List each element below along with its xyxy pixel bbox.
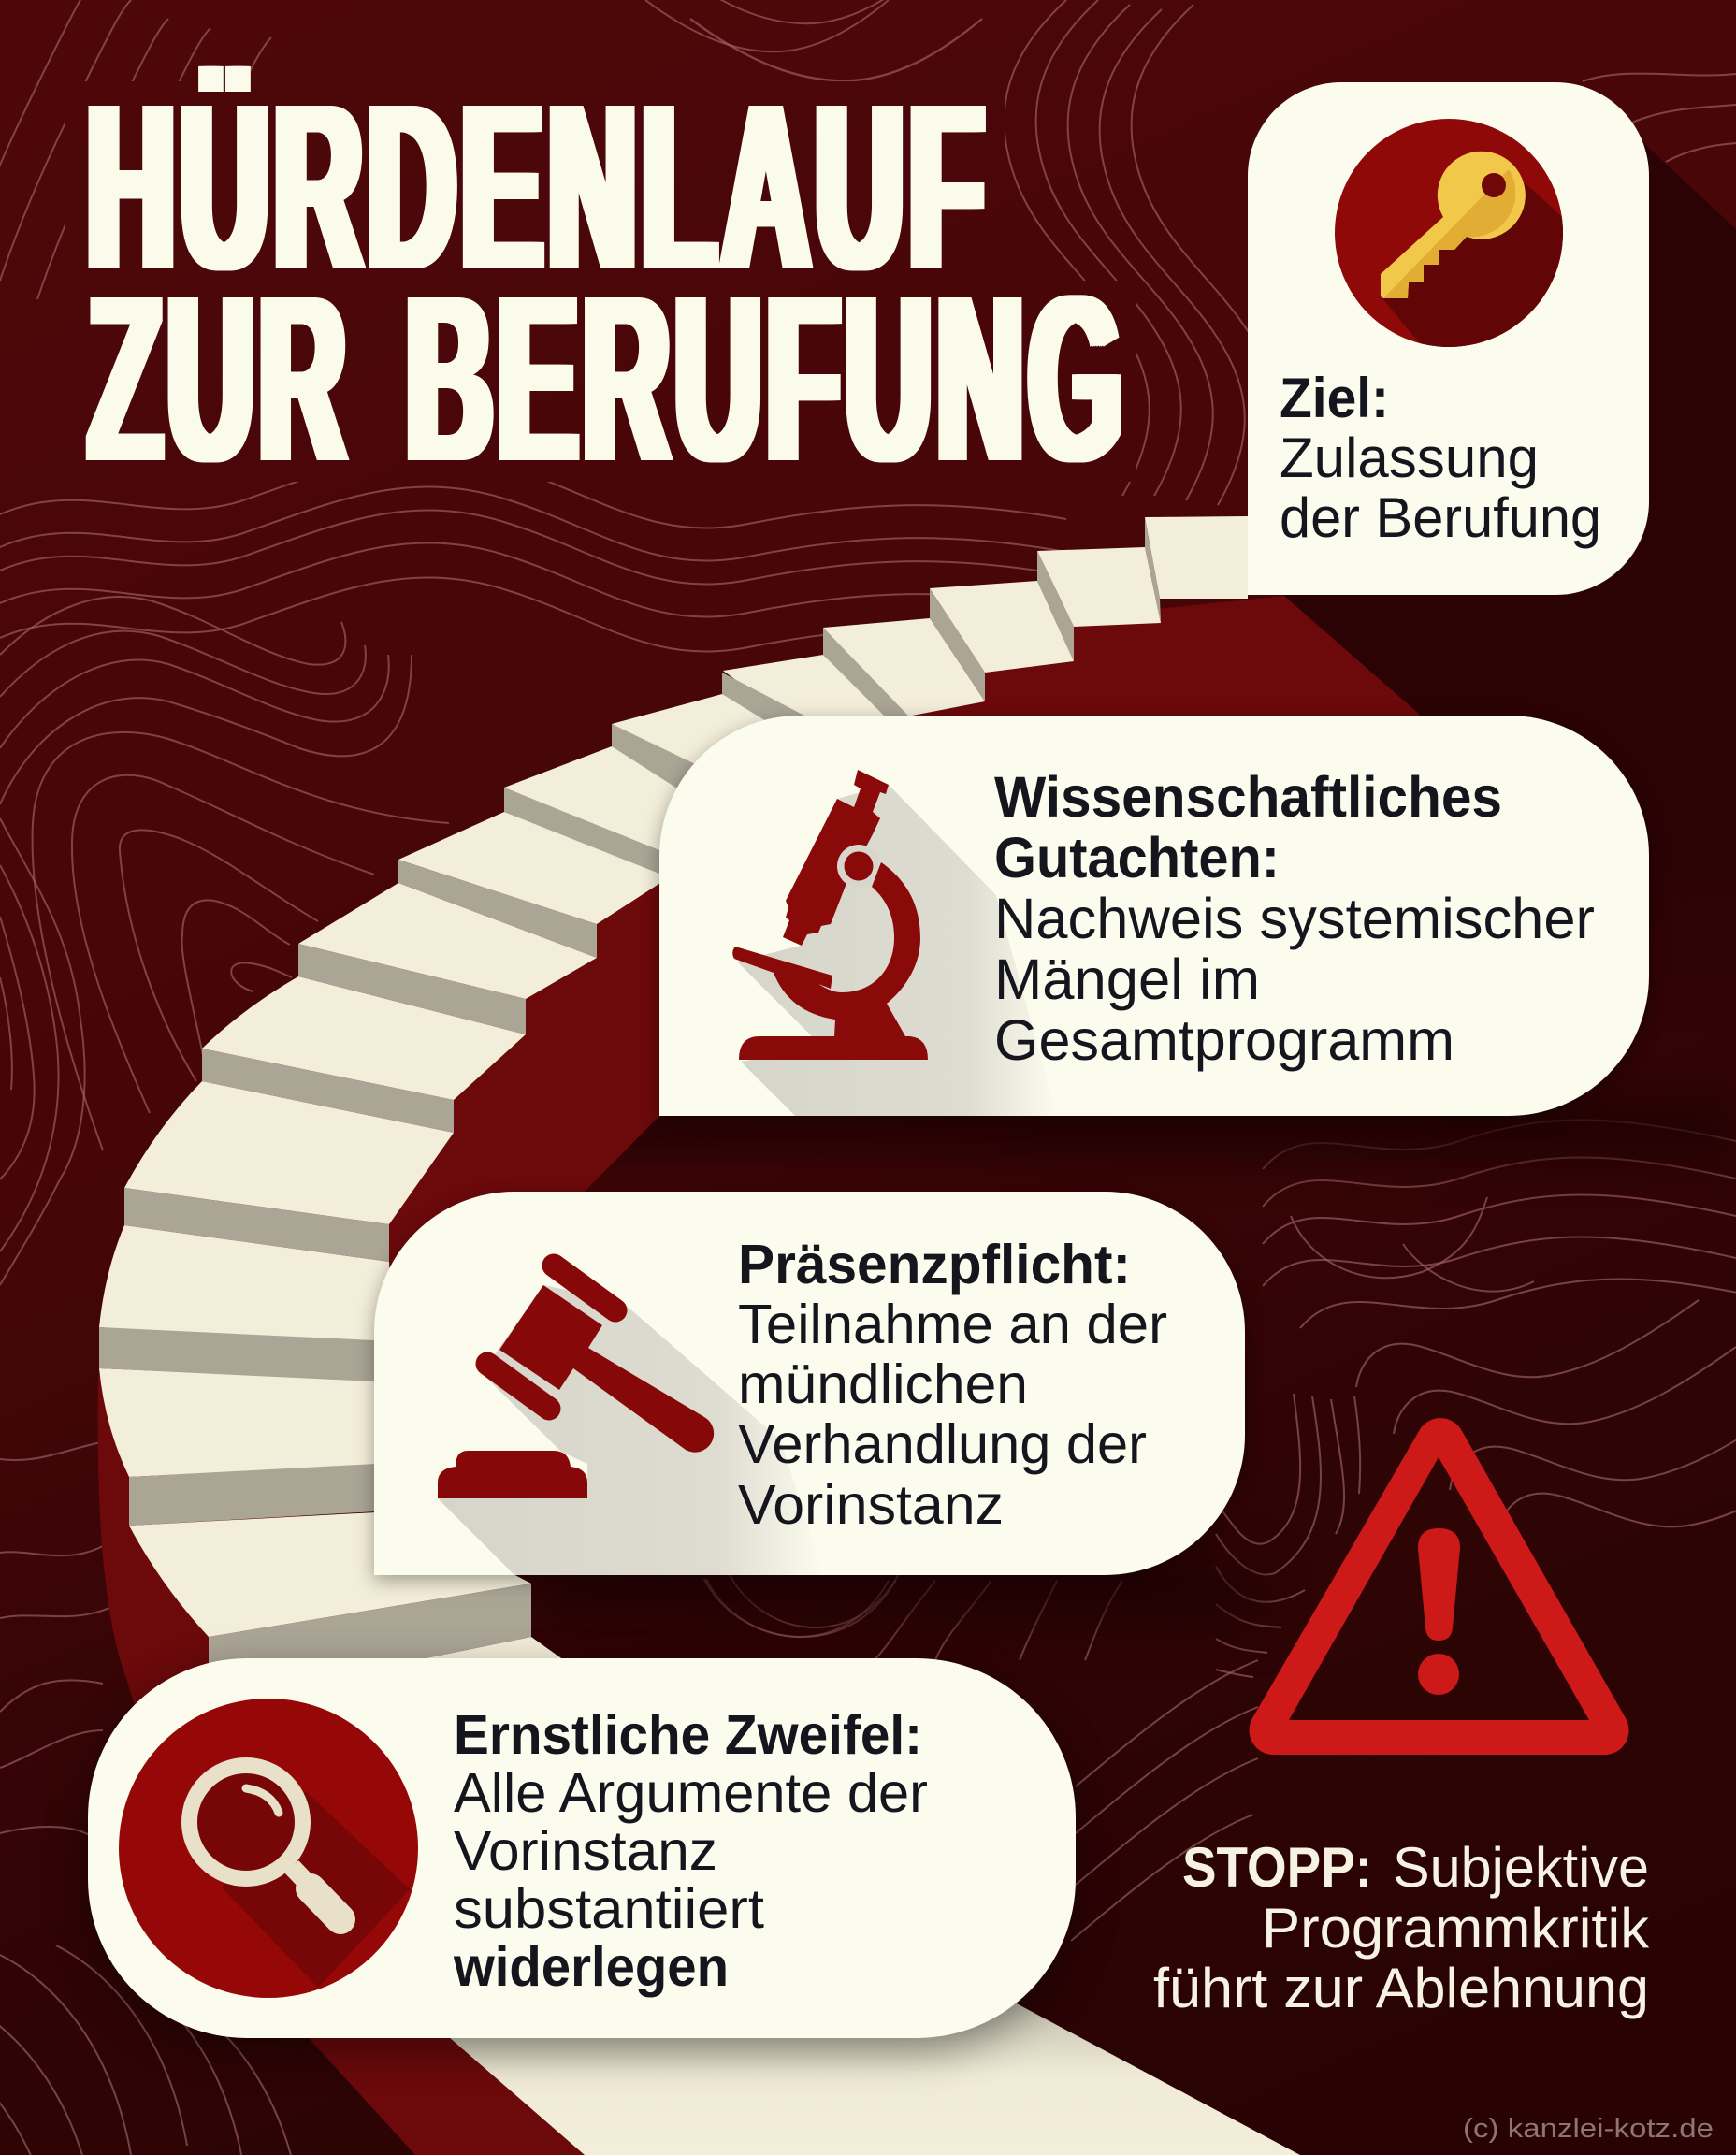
title: ZUR BERUFUNG (89, 246, 1127, 511)
card: doubts (88, 1658, 1076, 2038)
card: report (659, 716, 1649, 1116)
text: attendance (738, 1234, 1167, 1536)
text: goal: Zulassung (1280, 427, 1539, 489)
text: report (994, 765, 1595, 1072)
panel: Präsenzpflicht (374, 1192, 1245, 1575)
panel: Ziel (goal) (1248, 82, 1649, 595)
text: report: Mängel im (994, 947, 1260, 1011)
panel: wissenschaftliches Gutachten (659, 716, 1649, 1116)
card: attendance (374, 1192, 1245, 1575)
text: attendance: Präsenzpflicht: (738, 1234, 1131, 1295)
icon: key in circle (1335, 119, 1563, 347)
text: doubts (453, 1704, 928, 1998)
text: stop warning: STOPP: (1182, 1836, 1372, 1899)
spiral staircase (99, 516, 1300, 2155)
stair risers (99, 517, 1161, 1665)
stair treads (99, 516, 1248, 1665)
text: attendance: Verhandlung der (738, 1413, 1147, 1475)
title (86, 54, 1127, 511)
text: goal (1280, 367, 1601, 549)
text: doubts: widerlegen (453, 1936, 729, 1998)
text: goal: der Berufung (1280, 486, 1601, 549)
icon: microscope (732, 770, 1057, 1116)
text: doubts: substantiiert (454, 1878, 764, 1940)
text: stop warning: führt zur Ablehnung (1153, 1957, 1649, 2019)
title: HÜRDENLAUF (87, 54, 990, 319)
shadow below panel 3 (533, 1562, 1263, 1627)
text: doubts: Alle Argumente der (454, 1762, 928, 1824)
icon: magnifying glass in circle (119, 1699, 418, 1998)
lower stair run (449, 2002, 1300, 2155)
text: copyright: (c) kanzlei-kotz.de (1463, 2114, 1714, 2144)
text: attendance: Teilnahme an der (738, 1294, 1167, 1355)
panel: Ernstliche Zweifel (88, 1658, 1076, 2038)
text: doubts: Vorinstanz (454, 1820, 717, 1882)
icon: warning triangle (1250, 1418, 1629, 1755)
text: attendance: Vorinstanz (738, 1474, 1004, 1536)
text: report: Gesamtprogramm (994, 1008, 1454, 1072)
staircase support: red crescent (98, 596, 1420, 2155)
text: report: Wissenschaftliches (994, 765, 1502, 829)
shadow below panel 2 (561, 1104, 1736, 1160)
text: report: Nachweis systemischer (994, 887, 1595, 950)
long shadow behind goal panel (935, 94, 1736, 1216)
text: doubts: Ernstliche Zweifel: (454, 1704, 922, 1766)
text: stop warning: Programmkritik (1262, 1897, 1650, 1960)
text: stop warning: Subjektive (1393, 1836, 1649, 1899)
text: report: Gutachten: (994, 826, 1280, 889)
card: goal (1248, 82, 1649, 595)
icon: gavel (438, 1266, 823, 1575)
text: goal: Ziel: (1280, 367, 1389, 429)
text: attendance: mündlichen (738, 1353, 1028, 1415)
text: stop warning (1153, 1836, 1650, 2019)
